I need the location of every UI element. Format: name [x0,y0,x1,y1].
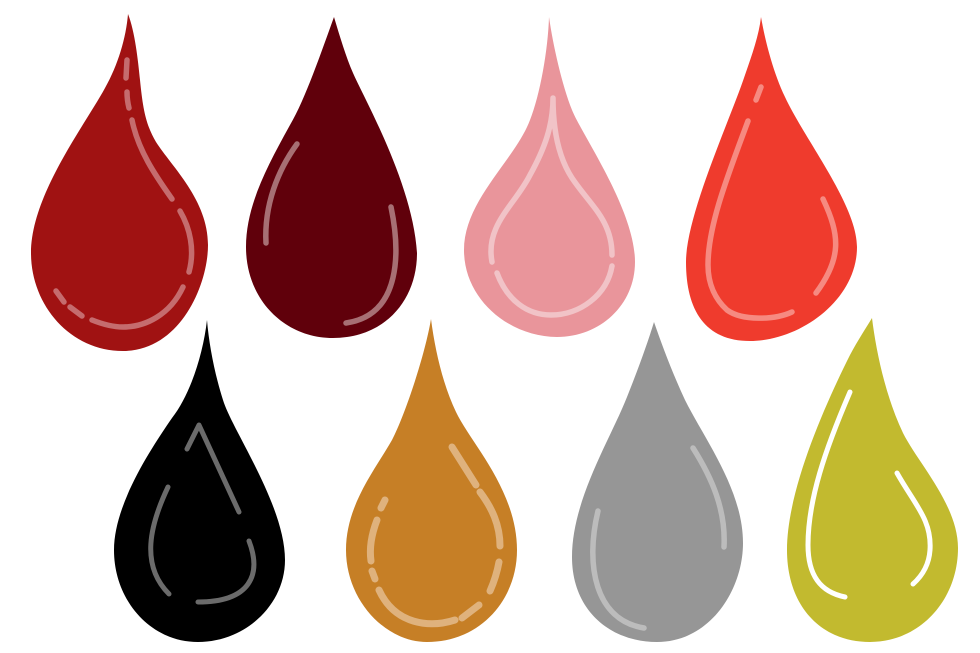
drop: bright red [686,17,857,341]
drop: black [114,320,285,642]
drop: grey [572,322,743,642]
drop: dark red [31,14,208,351]
drop: olive [787,318,958,642]
drop: ochre [346,319,517,642]
drop: maroon [246,17,417,338]
drop: pink [464,17,635,337]
